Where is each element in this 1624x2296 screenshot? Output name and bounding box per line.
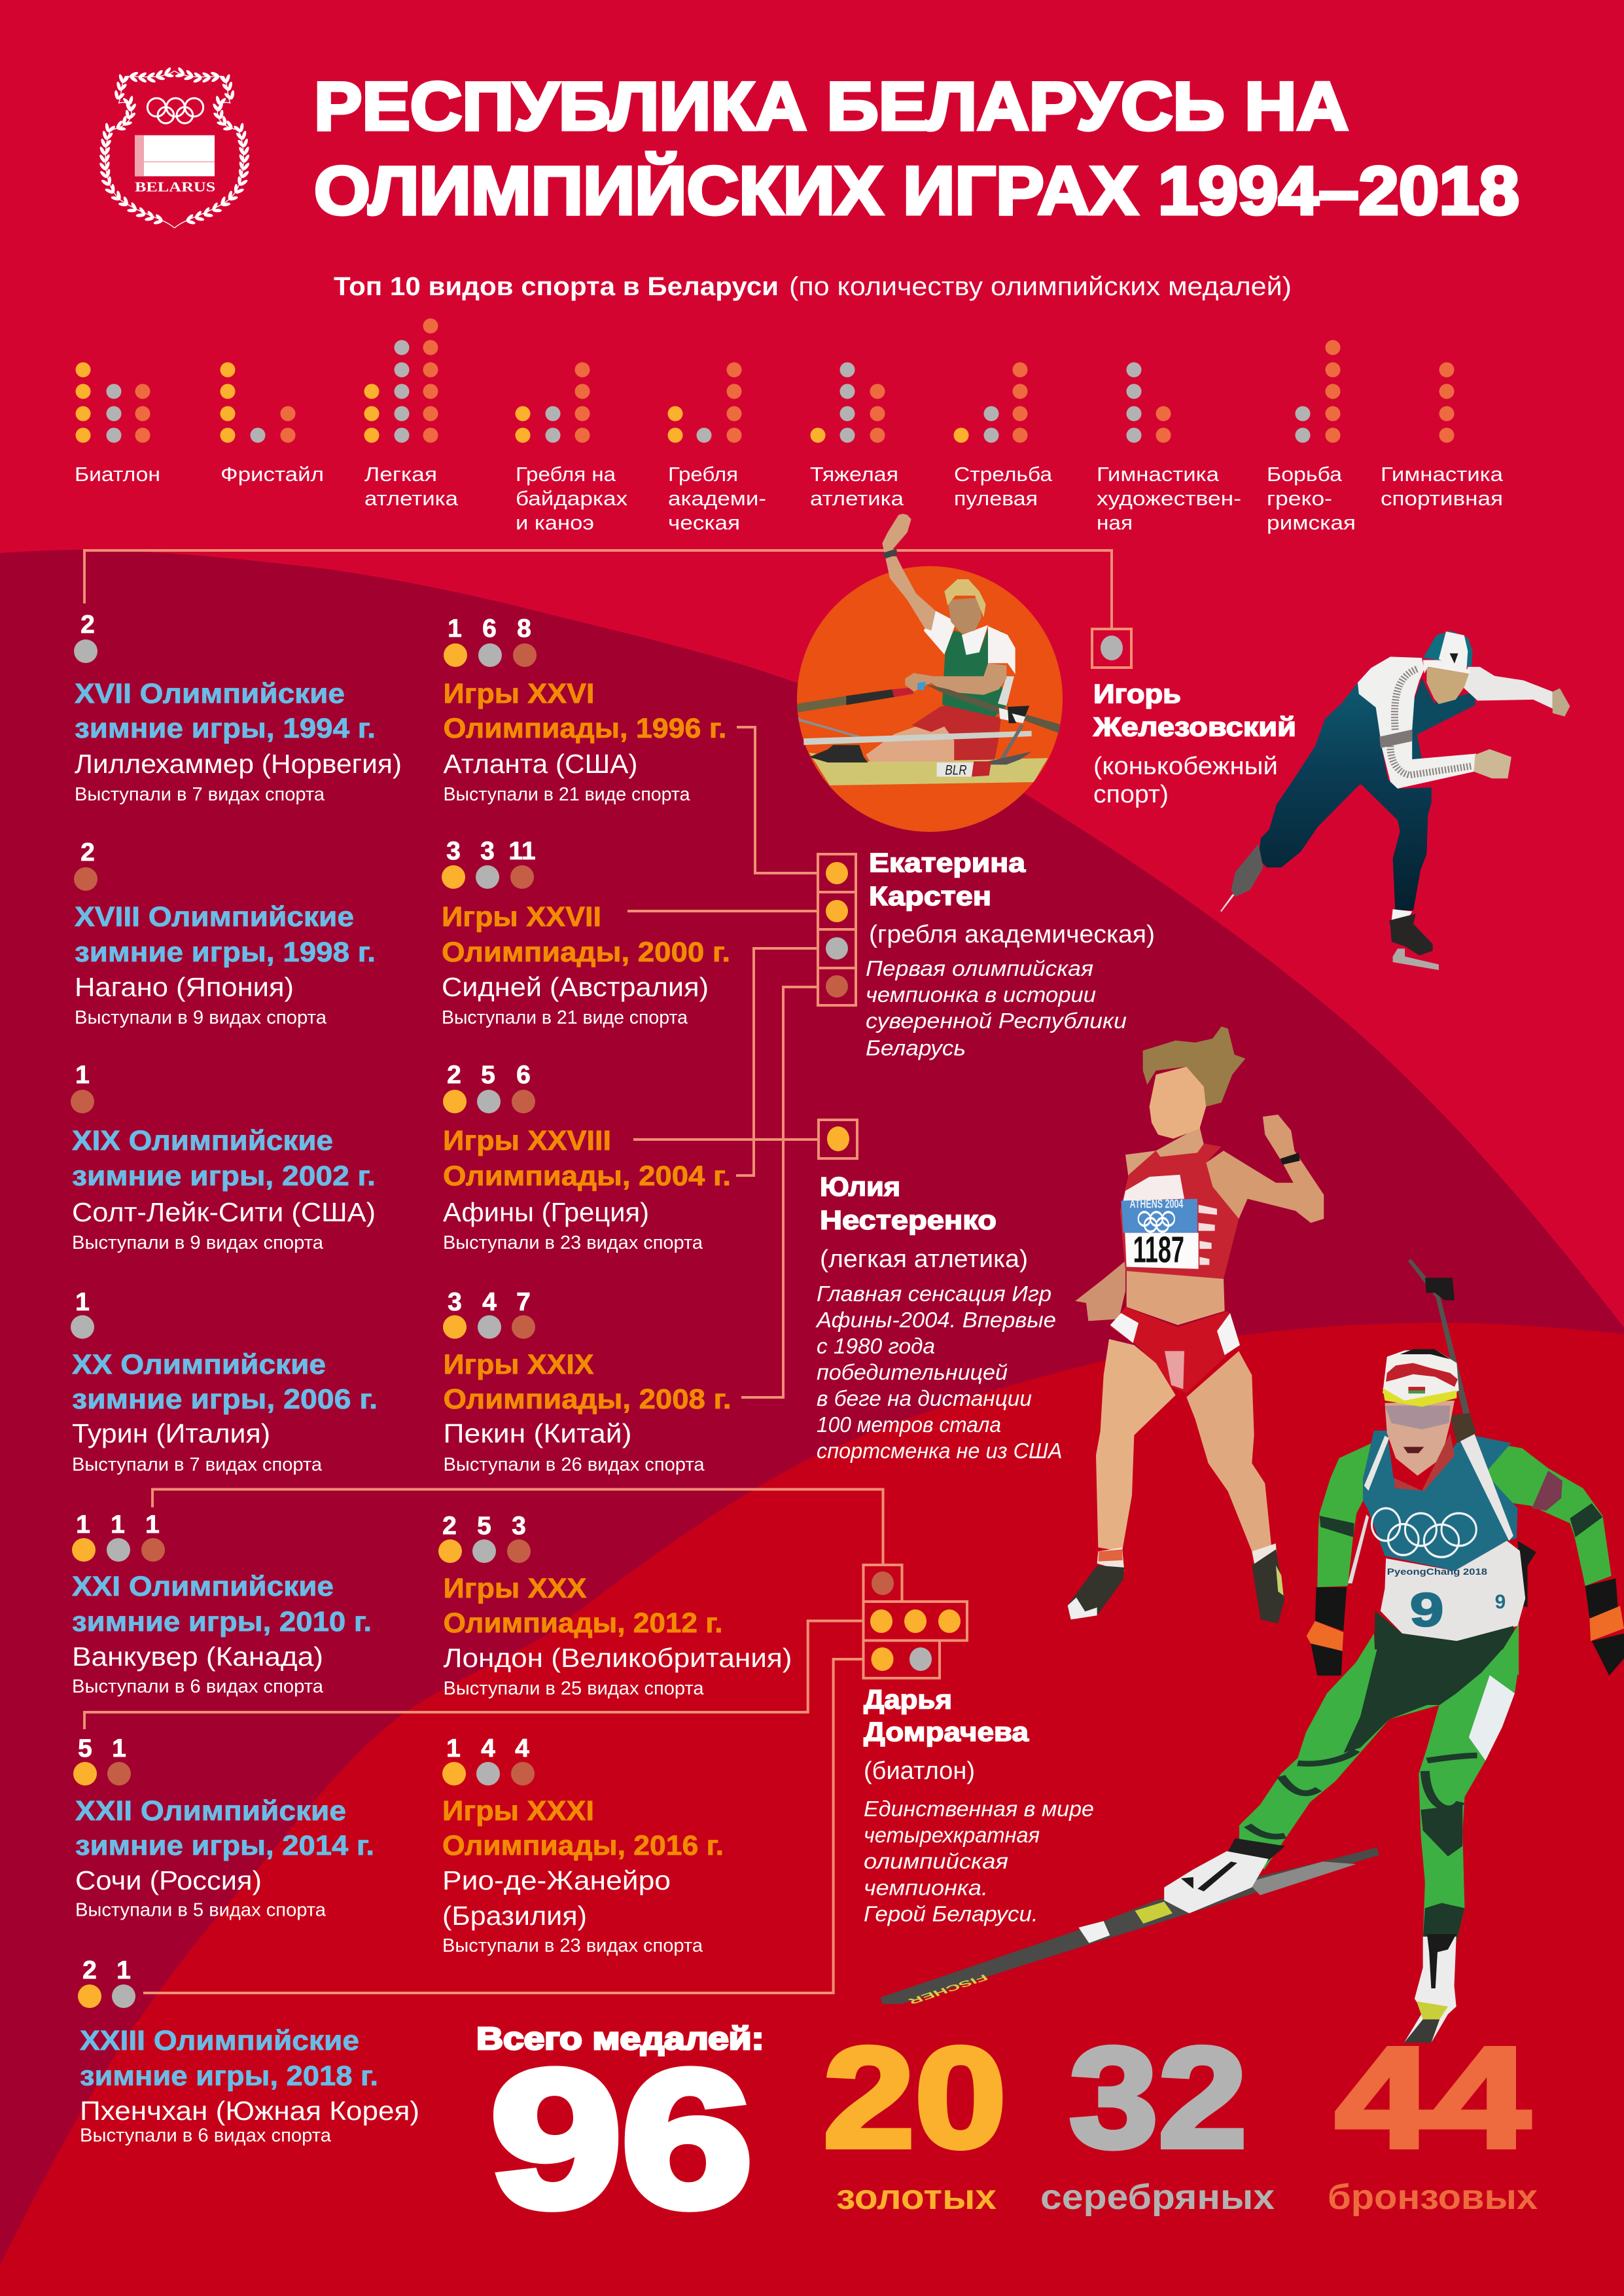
heading: Игры XXVII bbox=[442, 901, 601, 933]
games: XXI 2010 bbox=[72, 1511, 372, 1697]
sport: (легкая атлетика) bbox=[820, 1246, 1028, 1273]
medal box bbox=[1092, 629, 1131, 668]
medal counts: 6 bbox=[516, 1061, 531, 1089]
place: Лондон (Великобритания) bbox=[444, 1643, 792, 1673]
medal counts bbox=[73, 1734, 131, 1785]
heading: XX Олимпийские bbox=[72, 1349, 326, 1380]
description: Первая олимпийская bbox=[866, 956, 1093, 980]
name: Дарья bbox=[864, 1685, 952, 1715]
description bbox=[866, 956, 1127, 1060]
medal box bbox=[819, 1120, 857, 1158]
ski: FISCHER bbox=[906, 1973, 990, 2006]
medal counts: 1 bbox=[448, 615, 462, 643]
heading: зимние игры, 1998 г. bbox=[75, 937, 376, 968]
photo: biathlete Domracheva, upper body with rifle: 9 bbox=[1495, 1591, 1506, 1613]
description: чемпионка в истории bbox=[866, 982, 1096, 1007]
chart column: Легкая атлетика bbox=[364, 318, 459, 510]
subtitle: top 10 sports: (по количеству олимпийских медалей) bbox=[789, 272, 1292, 301]
medal counts bbox=[438, 1512, 531, 1563]
chart column: Гимнастика художественная: ная bbox=[1097, 511, 1133, 534]
sports count: Выступали в 21 виде спорта bbox=[442, 1007, 688, 1028]
heading: зимние игры, 2018 г. bbox=[80, 2060, 378, 2092]
medal counts: 2 bbox=[447, 1061, 461, 1089]
chart column: Тяжелая атлетика: Тяжелая bbox=[810, 463, 898, 486]
heading: зимние игры, 2006 г. bbox=[72, 1384, 378, 1415]
total number: 96 bbox=[491, 2030, 752, 2247]
medal counts: 1 bbox=[111, 1511, 125, 1539]
place: Пекин (Китай) bbox=[444, 1418, 632, 1448]
heading bbox=[442, 901, 730, 968]
totals: silver: 32 bbox=[1069, 2018, 1247, 2178]
title: РЕСПУБЛИКА БЕЛАРУСЬ НА bbox=[314, 69, 1349, 145]
heading: Игры XXVIII bbox=[443, 1125, 611, 1157]
medal counts bbox=[442, 837, 536, 889]
chart column: Борьба греко-римская: римская bbox=[1267, 511, 1356, 534]
description: Единственная в мире bbox=[864, 1797, 1094, 1821]
place: Рио-де-Жанейро bbox=[442, 1865, 671, 1895]
chart column: Борьба греко-римская: греко- bbox=[1267, 487, 1332, 510]
chart column: Фристайл: Фристайл bbox=[221, 463, 324, 486]
photo: biathlete Domracheva, upper body with rifle: 9 bbox=[1410, 1583, 1443, 1636]
subtitle: top 10 sports: Топ 10 видов спорта в Беларуси bbox=[334, 272, 779, 301]
medal counts: 3 bbox=[480, 837, 495, 865]
heading: Игры XXIX bbox=[444, 1349, 594, 1380]
medal counts: 1 bbox=[446, 1734, 461, 1763]
totals: gold bbox=[823, 2018, 1006, 2217]
name: Домрачева bbox=[864, 1717, 1029, 1747]
place: Сочи (Россия) bbox=[75, 1865, 262, 1895]
medal boxes bbox=[818, 854, 856, 1005]
medal counts: 4 bbox=[481, 1734, 495, 1763]
place: Пхенчхан (Южная Корея) bbox=[80, 2096, 419, 2126]
totals: bronze bbox=[1328, 2018, 1538, 2217]
medal counts: 3 bbox=[446, 837, 461, 865]
medal counts bbox=[74, 838, 97, 891]
heading bbox=[75, 901, 376, 968]
chart column: Биатлон bbox=[75, 363, 160, 486]
medal boxes bbox=[864, 1565, 967, 1678]
sport bbox=[1093, 753, 1278, 808]
chart column: Стрельба пулевая bbox=[954, 363, 1053, 510]
chart column: Гребля академическая: Гребля bbox=[668, 463, 738, 486]
chart column: Гребля академическая bbox=[667, 363, 766, 534]
medal counts: 5 bbox=[481, 1061, 495, 1089]
chart column: Борьба греко-римская bbox=[1267, 340, 1356, 534]
photo: Karsten in rowing boat on orange circle bbox=[792, 514, 1063, 832]
medal counts bbox=[444, 615, 537, 667]
games: XIX 2002 bbox=[71, 1061, 376, 1253]
medal counts: 11 bbox=[508, 837, 536, 865]
medal counts: 1 bbox=[75, 1061, 90, 1089]
heading: Олимпиады, 2016 г. bbox=[442, 1830, 724, 1861]
place: Афины (Греция) bbox=[443, 1197, 649, 1227]
heading: XXI Олимпийские bbox=[72, 1571, 334, 1602]
sport: (биатлон) bbox=[864, 1757, 975, 1785]
sports count: Выступали в 6 видах спорта bbox=[72, 1676, 324, 1697]
photo: sprinter Nesterenko: 1187 bbox=[1133, 1229, 1184, 1270]
subtitle: top 10 sports bbox=[334, 272, 1292, 301]
chart column: Гимнастика спортивная: Гимнастика bbox=[1381, 463, 1504, 486]
sports count: Выступали в 9 видах спорта bbox=[75, 1007, 327, 1028]
medal counts bbox=[71, 1288, 94, 1339]
medal counts: 5 bbox=[477, 1512, 491, 1540]
totals: all medals bbox=[476, 2022, 764, 2247]
sport: (конькобежный bbox=[1093, 753, 1278, 780]
total label: Всего медалей: bbox=[476, 2022, 764, 2056]
heading bbox=[80, 2025, 378, 2092]
heading: Игры XXXI bbox=[442, 1795, 594, 1827]
games: XVIII 1998 bbox=[74, 838, 376, 1028]
totals: silver: серебряных bbox=[1040, 2178, 1275, 2217]
totals: gold: 20 bbox=[823, 2018, 1006, 2178]
chart column: Гребля академическая: академи- bbox=[668, 487, 766, 510]
description: с 1980 года bbox=[817, 1334, 935, 1358]
heading: зимние игры, 1994 г. bbox=[75, 713, 376, 744]
games: XX 2006 bbox=[71, 1288, 378, 1475]
place: Солт-Лейк-Сити (США) bbox=[72, 1197, 376, 1227]
description: олимпийская bbox=[864, 1849, 1008, 1873]
sports count: Выступали в 26 видах спорта bbox=[444, 1454, 705, 1475]
description: чемпионка. bbox=[864, 1876, 988, 1899]
background: bottom red wave bbox=[0, 1323, 1624, 2296]
totals: bronze: бронзовых bbox=[1328, 2178, 1538, 2217]
place: Лиллехаммер (Норвегия) bbox=[75, 749, 402, 779]
heading bbox=[444, 678, 726, 744]
games: XXVII 2000 bbox=[442, 837, 730, 1028]
heading: Олимпиады, 1996 г. bbox=[444, 713, 726, 744]
rifle bbox=[1407, 1259, 1470, 1414]
sports count: Выступали в 5 видах спорта bbox=[75, 1899, 327, 1920]
medal counts bbox=[443, 1288, 535, 1339]
games: XXIII 2018 bbox=[78, 1956, 419, 2146]
games: XXVI 1996 bbox=[444, 615, 726, 805]
heading: зимние игры, 2010 г. bbox=[72, 1606, 372, 1638]
name: Железовский bbox=[1093, 712, 1296, 742]
chart column: Фристайл bbox=[220, 363, 324, 486]
heading bbox=[75, 678, 376, 744]
sports count: Выступали в 6 видах спорта bbox=[80, 2125, 332, 2146]
heading: XIX Олимпийские bbox=[72, 1125, 333, 1157]
medal counts: 2 bbox=[442, 1512, 457, 1540]
chart column: Стрельба пулевая: Стрельба bbox=[954, 463, 1053, 486]
heading bbox=[444, 1573, 722, 1639]
name: Игорь bbox=[1093, 679, 1181, 709]
place bbox=[442, 1865, 671, 1931]
connector lines bbox=[84, 550, 1112, 1993]
name: Карстен bbox=[869, 881, 991, 911]
description: Афины-2004. Впервые bbox=[815, 1308, 1056, 1332]
medal counts: 1 bbox=[75, 1288, 90, 1316]
chart column: Гребля академическая: ческая bbox=[668, 511, 740, 534]
description: в беге на дистанции bbox=[817, 1386, 1032, 1410]
heading: XVIII Олимпийские bbox=[75, 901, 354, 933]
sport: спорт) bbox=[1093, 781, 1169, 808]
photo: Karsten in rowing boat on orange circle: BLR bbox=[945, 761, 967, 778]
description: Главная сенсация Игр bbox=[817, 1282, 1051, 1306]
name bbox=[869, 848, 1026, 911]
logo: Belarus Olympic committee emblem bbox=[98, 66, 251, 228]
sports count: Выступали в 21 виде спорта bbox=[444, 784, 690, 805]
dot chart: top 10 sports by medals bbox=[75, 318, 1504, 534]
medal counts bbox=[442, 1734, 535, 1785]
place: Сидней (Австралия) bbox=[442, 972, 709, 1002]
title: ОЛИМПИЙСКИХ ИГРАХ 1994–2018 bbox=[314, 152, 1519, 229]
sports count: Выступали в 9 видах спорта bbox=[72, 1232, 324, 1253]
chart column: Биатлон: Биатлон bbox=[75, 463, 160, 486]
athlete: Игорь Железовский bbox=[1092, 629, 1296, 808]
medal counts: 5 bbox=[78, 1734, 92, 1763]
athlete: Юлия Нестеренко bbox=[815, 1120, 1063, 1463]
place: Атланта (США) bbox=[444, 749, 637, 779]
heading bbox=[72, 1571, 372, 1638]
games: XVII 1994 bbox=[74, 611, 402, 805]
sports count: Выступали в 7 видах спорта bbox=[72, 1454, 323, 1475]
name: Нестеренко bbox=[820, 1205, 997, 1235]
heading bbox=[443, 1125, 731, 1192]
description bbox=[815, 1282, 1063, 1463]
description: Беларусь bbox=[866, 1035, 966, 1060]
medal counts: 1 bbox=[116, 1956, 131, 1984]
medal counts: 1 bbox=[145, 1511, 160, 1539]
medal counts bbox=[71, 1061, 94, 1113]
heading: зимние игры, 2002 г. bbox=[72, 1160, 376, 1192]
heading bbox=[72, 1125, 376, 1192]
totals: bronze: 44 bbox=[1335, 2018, 1530, 2178]
heading: Олимпиады, 2004 г. bbox=[443, 1160, 731, 1192]
place: Ванкувер (Канада) bbox=[72, 1641, 323, 1672]
chart column: Легкая атлетика: Легкая bbox=[364, 463, 437, 486]
athlete: Дарья Домрачева bbox=[864, 1565, 1094, 1926]
heading: Олимпиады, 2012 г. bbox=[444, 1607, 722, 1639]
heading bbox=[75, 1795, 374, 1861]
chart column: Гимнастика художественная: Гимнастика bbox=[1097, 463, 1220, 486]
games: XXVIII 2004 bbox=[443, 1061, 731, 1253]
heading: Олимпиады, 2000 г. bbox=[442, 937, 730, 968]
photo: sprinter Nesterenko: ATHENS 2004 bbox=[1130, 1198, 1184, 1211]
medal counts bbox=[78, 1956, 135, 2008]
totals: silver bbox=[1040, 2018, 1275, 2217]
chart column: Гребля на байдарках и каноэ bbox=[516, 363, 628, 534]
medal counts: 7 bbox=[516, 1288, 531, 1316]
name bbox=[864, 1685, 1029, 1747]
photo: biathlete Domracheva, upper body with rifle: PyeongChang 2018 bbox=[1387, 1566, 1487, 1577]
medal counts: 4 bbox=[515, 1734, 529, 1763]
chart column: Гимнастика спортивная bbox=[1381, 363, 1504, 510]
name bbox=[820, 1172, 997, 1235]
description: суверенной Республики bbox=[866, 1009, 1127, 1033]
totals: gold: золотых bbox=[836, 2178, 997, 2217]
medal counts: 6 bbox=[482, 615, 497, 643]
medal counts bbox=[72, 1511, 165, 1562]
medal counts: 8 bbox=[517, 615, 531, 643]
games: XXII 2014 bbox=[73, 1734, 374, 1920]
photo: biathlete Domracheva, legs and ski bbox=[881, 1649, 1519, 2043]
description: спортсменка не из США bbox=[817, 1439, 1063, 1463]
games: XXX 2012 bbox=[438, 1512, 792, 1699]
sports count: Выступали в 7 видах спорта bbox=[75, 784, 325, 805]
chart column: Гребля на байдарках и каноэ: и каноэ bbox=[516, 511, 594, 534]
place: (Бразилия) bbox=[442, 1901, 587, 1931]
medal counts: 4 bbox=[482, 1288, 497, 1316]
heading bbox=[444, 1349, 732, 1415]
ski bbox=[881, 1847, 1379, 2006]
medal counts: 3 bbox=[512, 1512, 526, 1540]
chart column: Борьба греко-римская: Борьба bbox=[1267, 463, 1343, 486]
medal counts: 2 bbox=[82, 1956, 97, 1984]
logo: Belarus Olympic committee emblem: BELARUS bbox=[135, 179, 215, 194]
photo: sprinter Nesterenko bbox=[1068, 1026, 1324, 1624]
chart column: Гребля на байдарках и каноэ: байдарках bbox=[516, 487, 628, 510]
background: dark crimson wave bbox=[0, 550, 1624, 2296]
photo: speed skater Zhelezovsky bbox=[1220, 631, 1570, 970]
heading: Игры XXX bbox=[444, 1573, 587, 1604]
title bbox=[314, 69, 1519, 229]
chart column: Гимнастика спортивная: спортивная bbox=[1381, 487, 1503, 510]
medal counts bbox=[443, 1061, 535, 1113]
heading bbox=[442, 1795, 724, 1861]
games: XXXI 2016 bbox=[442, 1734, 724, 1956]
heading bbox=[72, 1349, 378, 1415]
sports count: Выступали в 25 видах спорта bbox=[444, 1678, 704, 1699]
chart column: Гребля на байдарках и каноэ: Гребля на bbox=[516, 463, 616, 486]
chart column: Тяжелая атлетика bbox=[810, 363, 904, 510]
name: Екатерина bbox=[869, 848, 1026, 878]
games: XXIX 2008 bbox=[443, 1288, 732, 1475]
medal counts bbox=[74, 611, 97, 663]
place: Турин (Италия) bbox=[72, 1418, 270, 1448]
medal counts: 2 bbox=[80, 838, 95, 867]
rowing boat (clipped by circle) bbox=[792, 696, 1048, 785]
photo: biathlete Domracheva, upper body with rifle bbox=[1307, 1259, 1624, 1676]
medal counts: 1 bbox=[76, 1511, 90, 1539]
heading: Олимпиады, 2008 г. bbox=[444, 1384, 732, 1415]
chart column: Стрельба пулевая: пулевая bbox=[954, 487, 1038, 510]
medal counts: 1 bbox=[112, 1734, 126, 1763]
heading: Игры XXVI bbox=[444, 678, 594, 709]
name: Юлия bbox=[820, 1172, 900, 1202]
heading: XVII Олимпийские bbox=[75, 678, 345, 709]
place: Нагано (Япония) bbox=[75, 972, 294, 1002]
heading: зимние игры, 2014 г. bbox=[75, 1830, 374, 1861]
chart column: Легкая атлетика: атлетика bbox=[364, 487, 459, 510]
description: Герой Беларуси. bbox=[864, 1902, 1038, 1926]
heading: XXII Олимпийские bbox=[75, 1795, 346, 1827]
description: победительницей bbox=[817, 1360, 1008, 1384]
description bbox=[864, 1797, 1094, 1926]
medal counts: 3 bbox=[448, 1288, 462, 1316]
chart column: Гимнастика художественная bbox=[1097, 363, 1241, 534]
heading: XXIII Олимпийские bbox=[80, 2025, 359, 2056]
sports count: Выступали в 23 видах спорта bbox=[442, 1935, 703, 1956]
athlete: Екатерина Карстен bbox=[818, 848, 1155, 1060]
description: 100 метров стала bbox=[817, 1412, 1001, 1437]
medal counts: 2 bbox=[80, 611, 95, 639]
sports count: Выступали в 23 видах спорта bbox=[443, 1232, 703, 1253]
chart column: Тяжелая атлетика: атлетика bbox=[810, 487, 904, 510]
sport: (гребля академическая) bbox=[869, 921, 1155, 948]
description: четырехкратная bbox=[864, 1823, 1040, 1847]
name bbox=[1093, 679, 1296, 742]
chart column: Гимнастика художественная: художествен- bbox=[1097, 487, 1241, 510]
